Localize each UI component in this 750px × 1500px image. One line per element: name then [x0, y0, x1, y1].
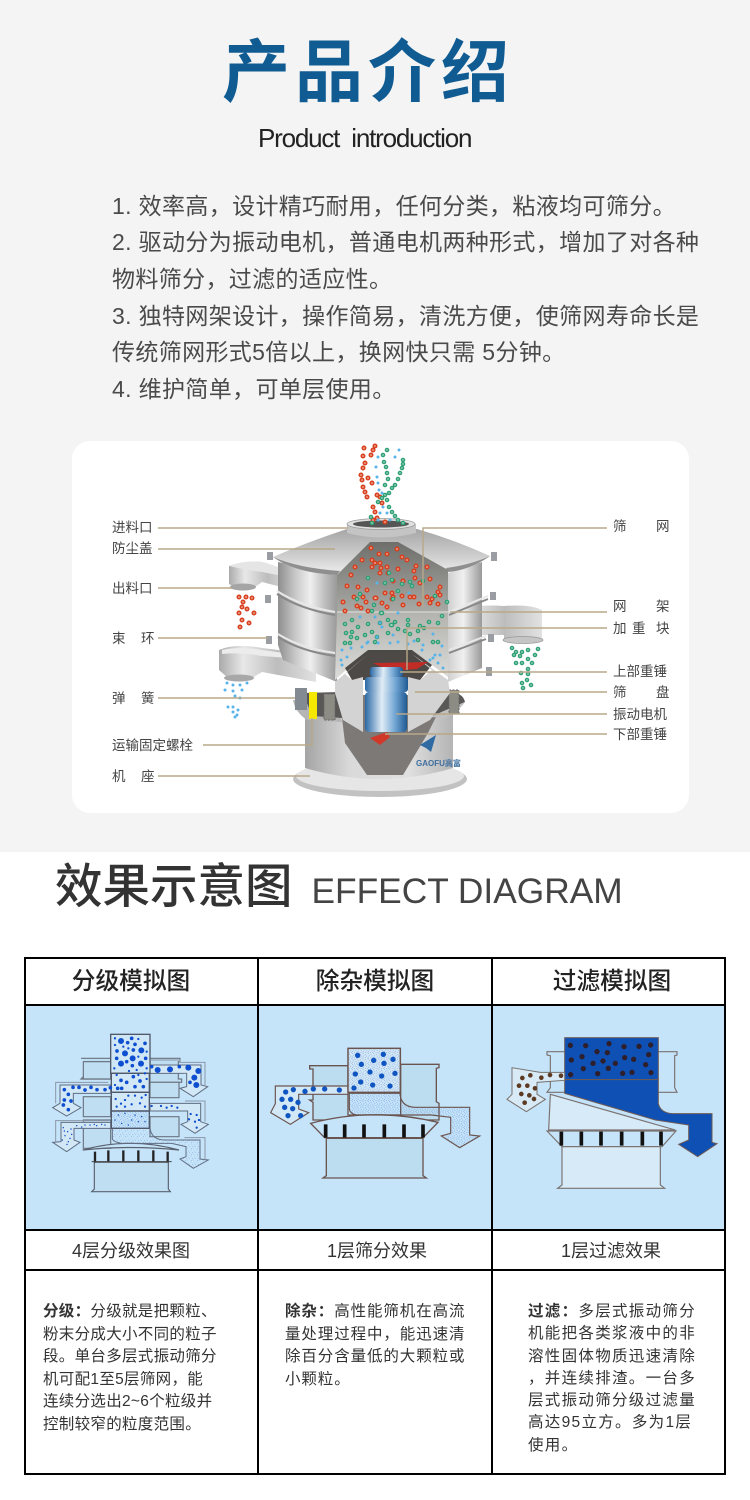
machine body [547, 1052, 677, 1188]
description: filtration: 过滤：多层式振动筛分 [528, 1303, 696, 1320]
description: impurity removal: 除百分含量低的大颗粒或 [285, 1348, 465, 1365]
right labels: 筛 [613, 519, 626, 534]
particles [121, 1041, 198, 1085]
right labels: 重 [632, 621, 646, 636]
text block: product features: 4. 维护简单，可单层使用。 [112, 376, 396, 402]
support posts [95, 1150, 168, 1162]
panel: comparison table [24, 957, 726, 1475]
subtitle: product introduction English: Product introduction [258, 123, 471, 153]
right labels: 块 [656, 621, 670, 636]
right labels: 筛 [613, 685, 626, 700]
diagram: impurity removal picture [259, 1006, 491, 1229]
description: grading: 分级：分级就是把颗粒、 [43, 1303, 217, 1320]
machine body [310, 1064, 439, 1178]
description: grading: 段。单台多层式振动筛分 [43, 1348, 217, 1365]
description: filtration: 层式振动筛分级过滤量 [528, 1392, 696, 1409]
chart: single layer screening flow [270, 1048, 482, 1179]
chart: four layer grading flow [51, 1034, 210, 1192]
machine body walls [265, 552, 497, 682]
description: filtration [528, 1302, 696, 1454]
outlet arrows [271, 1086, 480, 1148]
left labels: 进料口 [112, 520, 152, 535]
left labels: 防尘盖 [112, 541, 152, 556]
right labels: 上部重锤 [613, 664, 667, 679]
left labels: 出料口 [112, 581, 152, 596]
description: grading: 连续分选出2~6个粒级并 [43, 1393, 212, 1410]
left labels: 运输固定螺栓 [112, 738, 193, 753]
outlet arrows [53, 1065, 208, 1168]
tower [111, 1034, 150, 1128]
stand [83, 1143, 179, 1192]
vibration motor and weights [365, 662, 428, 745]
left labels [112, 520, 193, 784]
machine base [293, 692, 467, 797]
description: impurity removal: 除杂：高性能筛机在高流 [285, 1303, 465, 1320]
description: grading: 粉末分成大小不同的粒子 [43, 1326, 217, 1342]
description: impurity removal: 量处理过程中，能迅速清 [285, 1326, 465, 1342]
feed box speckle [349, 1049, 399, 1091]
machine dome and inlet [273, 518, 490, 575]
particles [282, 1054, 395, 1116]
description: impurity removal: 小颗粒。 [285, 1370, 351, 1388]
right labels: 网 [613, 599, 626, 614]
callout lines [158, 528, 607, 776]
diagram: grading picture [26, 1006, 257, 1229]
table header: impurity removal: 除杂模拟图 [316, 969, 434, 995]
text block: product features: 2. 驱动分为振动电机，普通电机两种形式，增加了对各种 [112, 229, 699, 255]
text block: product features: 物料筛分，过滤的适应性。 [112, 266, 392, 292]
left labels: 机 [112, 769, 126, 784]
caption: filtration: 1层过滤效果 [561, 1241, 661, 1261]
machine interior chamber [335, 542, 450, 732]
right labels: 下部重锤 [613, 727, 667, 742]
text block: product features: 传统筛网形式5倍以上，换网快只需 5分钟。 [112, 339, 566, 365]
table header: filtration: 过滤模拟图 [553, 969, 671, 995]
particles [570, 1044, 651, 1075]
table header: grading: 分级模拟图 [72, 969, 190, 995]
description: grading [43, 1302, 217, 1432]
description: filtration: 溶性固体物质迅速清除 [528, 1348, 696, 1365]
description: filtration: 高达95立方。多为1层 [528, 1414, 692, 1431]
title: product introduction Chinese: 产品介绍 [222, 35, 514, 111]
machine stacks [81, 1058, 182, 1148]
text block: product features: 3. 独特网架设计，操作简易，清洗方便，使筛网寿命长是 [112, 303, 699, 329]
left labels: 环 [141, 631, 154, 646]
logo [416, 735, 461, 768]
right labels: 振动电机 [613, 707, 667, 722]
filter tank [565, 1038, 717, 1157]
description: filtration: ，并连续排渣。一台多 [528, 1370, 696, 1387]
description: filtration: 使用。 [528, 1437, 578, 1454]
feed box [348, 1048, 400, 1092]
description: grading: 控制较窄的粒度范围。 [43, 1416, 201, 1432]
left labels: 簧 [141, 691, 154, 706]
left labels: 弹 [112, 691, 126, 706]
chart: filtration flow [506, 1037, 718, 1189]
caption: grading: 4层分级效果图 [72, 1241, 190, 1261]
description: filtration: 机能把各类浆液中的非 [528, 1325, 696, 1342]
heading: effect diagram: 效果示意图 EFFECT DIAGRAM [55, 861, 623, 914]
table borders [24, 957, 726, 1475]
logo: GAOFU高富 [416, 758, 461, 768]
description: impurity removal [285, 1302, 465, 1388]
diagram: filtration picture [493, 1006, 724, 1229]
panel: machine diagram card [72, 441, 689, 813]
support posts [561, 1132, 661, 1146]
left labels: 束 [112, 631, 126, 646]
text block: product features: 1. 效率高，设计精巧耐用，任何分类，粘液均可筛分。 [112, 193, 676, 219]
springs and yellow transport bolt [295, 688, 459, 720]
support posts [326, 1124, 423, 1138]
text block: product features [112, 193, 699, 402]
machine chutes [219, 562, 543, 682]
panel: product introduction background [0, 0, 750, 852]
left labels: 座 [141, 769, 154, 784]
right labels: 盘 [656, 684, 670, 700]
chart: vibrating screen cutaway diagram [112, 444, 670, 797]
particles: blue [225, 450, 443, 717]
right labels [613, 519, 670, 742]
particles: green [345, 450, 538, 688]
arrow outer frames [56, 1060, 205, 1160]
retained solids arrow [507, 1068, 565, 1112]
particles: red [239, 446, 440, 627]
caption: screening: 1层筛分效果 [327, 1241, 427, 1261]
right labels: 网 [656, 519, 670, 534]
right labels: 加 [613, 621, 626, 636]
right labels: 架 [656, 599, 670, 614]
description: grading: 机可配1至5层筛网，能 [43, 1370, 203, 1388]
